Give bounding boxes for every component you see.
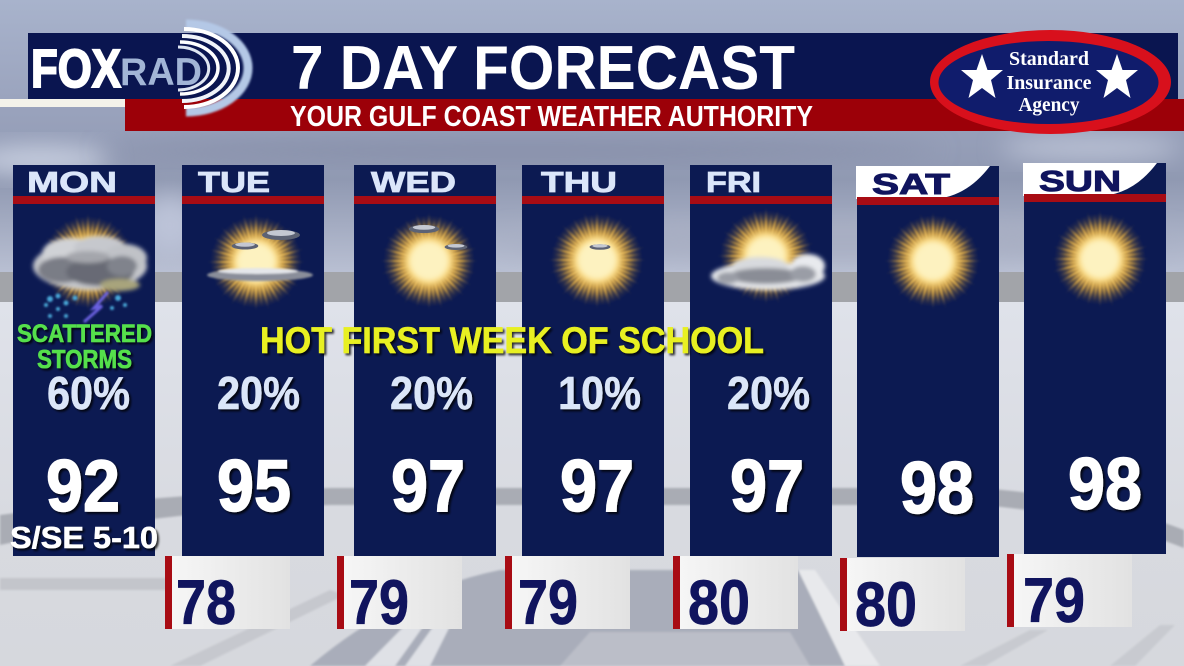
day label: SAT: SAT	[872, 169, 950, 201]
icon: sun	[1044, 203, 1156, 315]
panel: Friday	[690, 165, 832, 556]
icon: right star	[1096, 54, 1138, 98]
low: Thursday 79	[505, 556, 630, 638]
header: white strip	[0, 99, 125, 107]
wind: S/SE 5-10	[10, 520, 158, 555]
high temperature: 98	[1068, 444, 1142, 525]
logo: FOX RAD	[31, 24, 248, 112]
high temperature: 97	[391, 446, 465, 527]
panel: Thursday	[522, 165, 664, 556]
low: Saturday 80: 80	[855, 570, 917, 640]
logo: FOX RAD: FOX	[31, 39, 121, 99]
low: Sunday 79	[1007, 554, 1132, 636]
title: 7 DAY FORECAST	[291, 34, 795, 103]
high temperature: 98	[900, 448, 974, 529]
sponsor logo: Standard Insurance Agency	[930, 30, 1171, 134]
sponsor name: Agency	[1018, 94, 1080, 116]
low: Wednesday 79: 79	[349, 568, 409, 638]
day label: WED: WED	[371, 167, 456, 199]
header: red subtitle bar	[125, 99, 1184, 131]
day label: MON: MON	[27, 167, 117, 199]
panel: Saturday	[856, 166, 999, 557]
day label: FRI: FRI	[706, 167, 761, 199]
sponsor name: Standard	[1009, 48, 1089, 70]
condition: scattered storms	[17, 320, 152, 374]
icon: sunny with small clouds	[373, 205, 485, 317]
high temperature: 97	[560, 446, 634, 527]
high temperature: 97	[730, 446, 804, 527]
low: Friday 80	[673, 556, 798, 638]
icon: partly cloudy	[710, 200, 825, 312]
low: Sunday 79: 79	[1023, 566, 1085, 636]
high temperature: 92	[46, 446, 120, 527]
low: Tuesday 78	[165, 556, 290, 638]
icon: thunderstorm	[32, 206, 147, 322]
precipitation chance: 60%	[47, 367, 130, 419]
precipitation chance: 20%	[217, 367, 300, 419]
icon: sunny with a small cloud	[541, 204, 653, 316]
precipitation chance: 20%	[390, 367, 473, 419]
day label: THU: THU	[541, 167, 617, 199]
low: Friday 80: 80	[688, 568, 750, 638]
condition: scattered storms: STORMS	[37, 344, 132, 374]
callout: hot first week of school: HOT FIRST WEEK OF SCHOOL	[260, 320, 764, 361]
sponsor name: Insurance	[1006, 72, 1092, 94]
day label: SUN: SUN	[1039, 166, 1121, 198]
high temperature: 95	[217, 446, 291, 527]
icon: sun	[877, 205, 989, 317]
low: Tuesday 78: 78	[176, 568, 236, 638]
precipitation chance: 10%	[558, 367, 641, 419]
low: Wednesday 79	[337, 556, 462, 638]
day label: TUE: TUE	[198, 167, 270, 199]
precipitation chance: 20%	[727, 367, 810, 419]
panel: Wednesday	[354, 165, 496, 556]
subtitle: YOUR GULF COAST WEATHER AUTHORITY	[290, 101, 813, 133]
low: Thursday 79: 79	[518, 568, 578, 638]
low: Saturday 80	[840, 558, 965, 640]
header: navy title bar	[28, 33, 1178, 99]
sponsor name	[1006, 48, 1092, 116]
icon: left star	[961, 54, 1003, 98]
icon: mostly sunny	[200, 206, 313, 318]
panel: Tuesday	[182, 165, 324, 556]
panel: Sunday	[1023, 163, 1166, 554]
panel: Monday	[10, 165, 158, 556]
condition: scattered storms: SCATTERED	[17, 320, 152, 348]
logo: FOX RAD: RAD	[120, 51, 202, 94]
